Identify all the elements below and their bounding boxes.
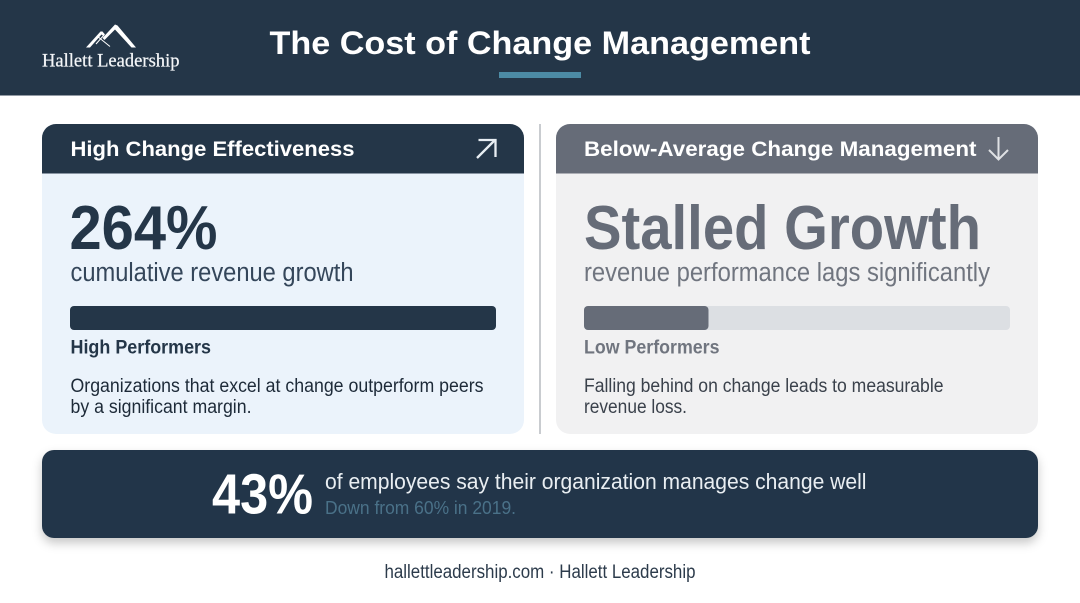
description	[70, 376, 484, 418]
title: The Cost of Change Management	[270, 25, 811, 61]
description: Falling behind on change leads to measurable	[584, 376, 944, 397]
icon: arrow up right	[477, 140, 496, 158]
progress bar: high performers	[70, 306, 496, 330]
description: Organizations that excel at change outperform peers	[70, 376, 484, 397]
panel: high change effectiveness	[42, 124, 524, 434]
bar label: High Performers	[70, 336, 211, 358]
title accent bar	[499, 72, 581, 78]
description	[584, 376, 944, 418]
callout subtext: Down from 60% in 2019.	[325, 498, 516, 518]
panel heading: High Change Effectiveness	[70, 138, 354, 161]
callout: 43% stat	[42, 450, 1038, 538]
progress bar: low performers	[584, 306, 1010, 330]
footer: hallettleadership.com · Hallett Leadership	[384, 562, 696, 583]
callout text: of employees say their organization manages change well	[325, 469, 866, 494]
statement caption: revenue performance lags significantly	[584, 259, 990, 287]
description: by a significant margin.	[70, 397, 252, 418]
panel: below-average change management	[556, 124, 1038, 434]
big stat: 264%: 264%	[70, 194, 218, 263]
description: revenue loss.	[584, 397, 687, 418]
panel header	[42, 124, 524, 174]
icon: arrow down	[989, 137, 1008, 160]
big statement: Stalled Growth	[584, 194, 981, 263]
stat caption: cumulative revenue growth	[70, 259, 354, 287]
bar label: Low Performers	[584, 336, 720, 358]
center divider	[539, 124, 541, 434]
header band	[0, 0, 1080, 96]
panel header	[556, 124, 1038, 174]
logo	[42, 24, 180, 72]
icon: mountains	[86, 24, 136, 48]
callout number: 43%	[212, 462, 313, 526]
logo wordmark: Hallett Leadership	[42, 50, 180, 72]
panel heading: Below-Average Change Management	[584, 138, 976, 161]
